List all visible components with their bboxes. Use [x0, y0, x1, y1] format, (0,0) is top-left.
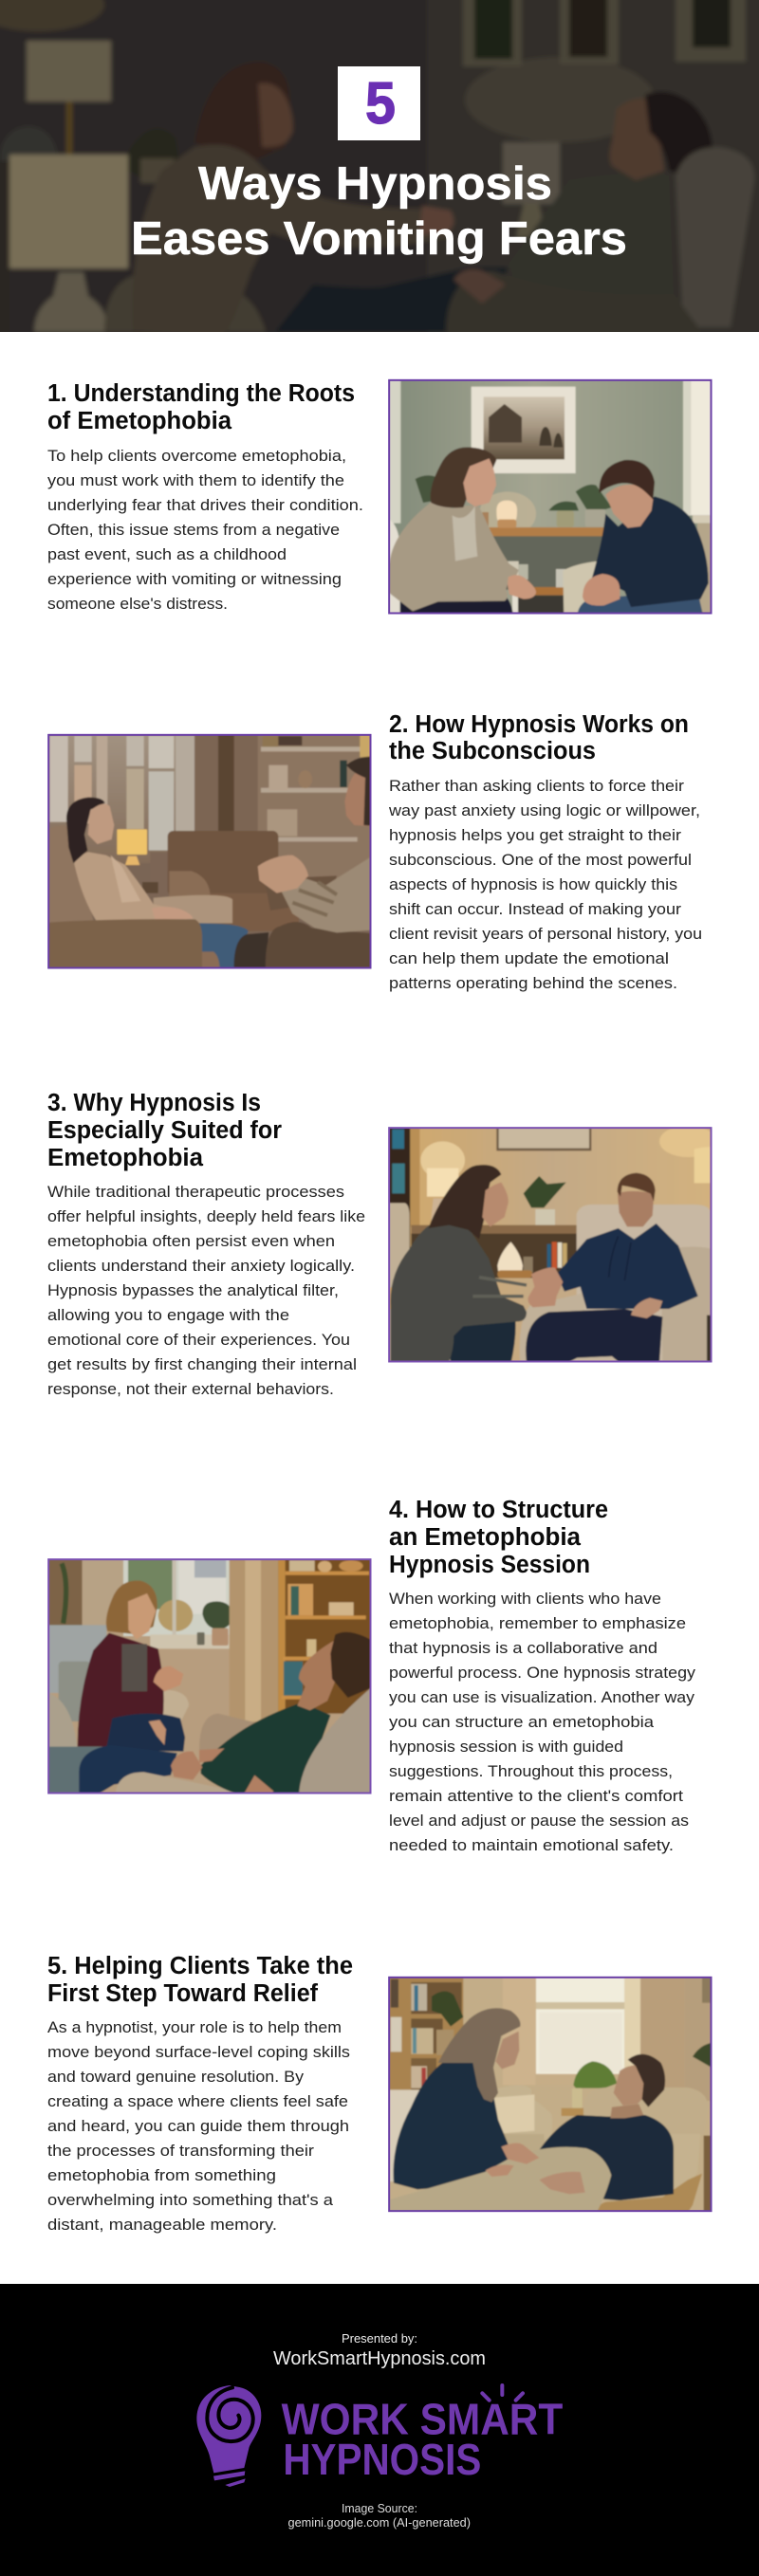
text block: section 4: that hypnosis is a collaborative and [389, 1639, 657, 1657]
text block: section 2: hypnosis helps you get straight to their [389, 826, 681, 844]
text block: section 4 [389, 1590, 696, 1854]
heading: section 4 [389, 1497, 608, 1578]
heading: section 3: Emetophobia [47, 1145, 204, 1171]
text block: section 2 [388, 777, 702, 992]
number badge: 5 [365, 71, 396, 137]
heading: section 1 [47, 380, 355, 434]
heading: section 1: 1. Understanding the Roots [47, 380, 355, 407]
text block: section 2: can help them update the emotional [389, 949, 669, 967]
text block: section 4: hypnosis session is with guided [389, 1738, 623, 1756]
panel: section 5 [47, 1953, 731, 2234]
panel: section 2 [33, 711, 702, 992]
text block: section 2: way past anxiety using logic or willpower, [388, 801, 700, 819]
footer [0, 2284, 759, 2576]
text block: section 4: you can structure an emetophobia [389, 1713, 655, 1731]
illustration: therapist beside client under blanket, sunlit room [388, 1977, 712, 2212]
text block: section 3: clients understand their anxiety logically. [47, 1257, 355, 1275]
panel: section 4 [33, 1497, 696, 1854]
text block: section 4: level and adjust or pause the session as [389, 1812, 689, 1830]
heading: section 5: 5. Helping Clients Take the [47, 1953, 353, 1979]
text block: section 1: someone else's distress. [47, 595, 228, 613]
hero banner [0, 0, 759, 360]
presented by: Presented by: [342, 2331, 417, 2346]
image source: Image Source: [342, 2502, 417, 2515]
number badge [338, 66, 420, 140]
text block: section 2: Rather than asking clients to force their [389, 777, 684, 795]
wordmark [282, 2385, 563, 2484]
heading: section 4: an Emetophobia [389, 1524, 582, 1551]
title: Ways Hypnosis [198, 158, 552, 210]
heading: section 2: the Subconscious [389, 738, 596, 764]
text block: section 2: client revisit years of personal history, you [389, 925, 702, 943]
text block: section 1: Often, this issue stems from a negative [47, 521, 340, 539]
heading: section 1: of Emetophobia [47, 408, 232, 434]
text block: section 5: and heard, you can guide them through [47, 2117, 349, 2135]
icon: spiral light bulb [196, 2385, 261, 2487]
text block: section 5: distant, manageable memory. [47, 2216, 277, 2234]
heading: section 4: 4. How to Structure [389, 1497, 608, 1523]
heading: section 2 [389, 711, 689, 764]
heading: section 2: 2. How Hypnosis Works on [389, 711, 689, 738]
text block: section 2: patterns operating behind the scenes. [389, 974, 677, 992]
text block: section 2: subconscious. One of the most powerful [389, 851, 692, 869]
text block: section 2: shift can occur. Instead of making your [389, 900, 681, 918]
text block: section 1: underlying fear that drives their condition. [47, 496, 363, 514]
text block: section 1: To help clients overcome emetophobia, [47, 447, 346, 465]
panel: section 1 [47, 379, 712, 615]
text block: section 5: move beyond surface-level coping skills [47, 2043, 350, 2061]
heading: section 4: Hypnosis Session [389, 1552, 590, 1578]
title [131, 158, 627, 265]
text block: section 5: the processes of transforming their [47, 2142, 314, 2160]
text block: section 1: past event, such as a childhood [47, 545, 287, 563]
heading: section 3: Especially Suited for [47, 1117, 282, 1144]
text block: section 3: emotional core of their experiences. You [47, 1331, 350, 1349]
heading: section 5 [47, 1953, 353, 2007]
hero photo: therapist and client in dim room [0, 0, 759, 360]
text block: section 1: you must work with them to identify the [47, 471, 344, 489]
text block: section 4: needed to maintain emotional safety. [389, 1836, 674, 1854]
text block: section 3: get results by first changing their internal [47, 1355, 357, 1373]
image source [288, 2502, 471, 2530]
text block: section 5: and toward genuine resolution. By [47, 2068, 305, 2086]
text block: section 5: emetophobia from something [47, 2166, 276, 2184]
text block: section 4: When working with clients who have [389, 1590, 661, 1608]
heading: section 5: First Step Toward Relief [47, 1980, 318, 2007]
heading: section 3 [47, 1090, 282, 1171]
text block: section 4: emetophobia, remember to emphasize [389, 1614, 686, 1632]
heading: section 3: 3. Why Hypnosis Is [47, 1090, 261, 1116]
text block: section 3: While traditional therapeutic processes [47, 1183, 344, 1201]
text block: section 5: As a hypnotist, your role is to help them [47, 2018, 342, 2036]
text block: section 5 [47, 2018, 350, 2234]
title: Eases Vomiting Fears [131, 213, 627, 265]
text block: section 4: you can use is visualization. Another way [389, 1688, 695, 1706]
text block: section 3: offer helpful insights, deeply held fears like [47, 1207, 365, 1225]
text block: section 4: remain attentive to the client's comfort [389, 1787, 683, 1805]
illustration: therapist facing seated client, sage room [388, 379, 712, 615]
text block: section 1 [47, 447, 363, 613]
text block: section 3: Hypnosis bypasses the analytical filter, [47, 1281, 339, 1299]
panel: section 3 [47, 1090, 731, 1398]
text block: section 5: creating a space where clients feel safe [47, 2092, 348, 2110]
image source: gemini.google.com (AI-generated) [288, 2516, 471, 2530]
presented by: WorkSmartHypnosis.com [273, 2348, 486, 2369]
logo: Work Smart Hypnosis [196, 2383, 563, 2487]
text block: section 3: allowing you to engage with the [47, 1306, 289, 1324]
illustration: therapist holding client's hand, amber room [388, 1127, 712, 1362]
text block: section 3 [47, 1183, 365, 1398]
text block: section 2: aspects of hypnosis is how quickly this [389, 875, 677, 893]
presented by [273, 2331, 486, 2369]
text block: section 5: overwhelming into something that's a [47, 2191, 334, 2209]
text block: section 4: powerful process. One hypnosis strategy [389, 1664, 696, 1682]
text block: section 1: experience with vomiting or witnessing [47, 570, 342, 588]
illustration: therapist talking to reclining client, bookshelf room [47, 1558, 372, 1794]
text block: section 4: suggestions. Throughout this process, [389, 1762, 673, 1780]
text block: section 3: emetophobia often persist even when [47, 1232, 335, 1250]
wordmark: HYPNOSIS [283, 2435, 481, 2484]
text block: section 3: response, not their external behaviors. [47, 1380, 334, 1398]
illustration: relaxed woman and gesturing therapist, warm brown room [47, 734, 372, 969]
